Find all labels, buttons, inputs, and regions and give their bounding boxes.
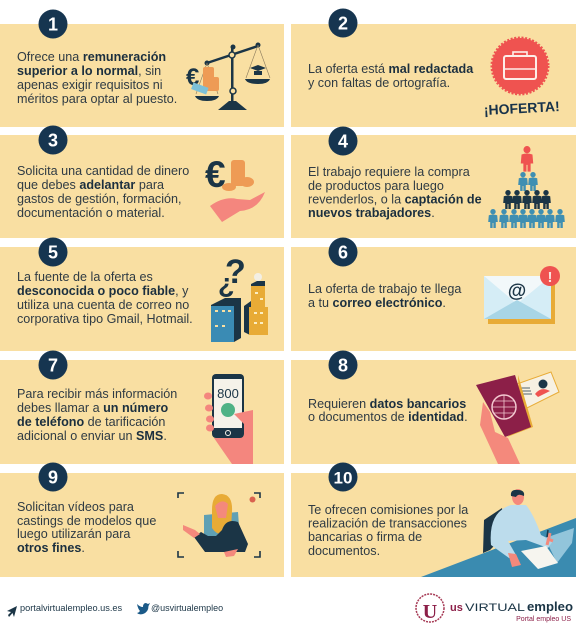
icon: question marks and buildings: ¿	[218, 268, 234, 298]
text 7: debes llamar a	[17, 401, 103, 415]
text 10: Te ofrecen comisiones por la	[308, 503, 468, 517]
icon: scale: €	[186, 64, 199, 91]
illustration: man signing documents	[421, 489, 576, 577]
text 4: revenderlos, o la	[308, 192, 405, 206]
text 4: .	[431, 206, 435, 220]
number 1	[38, 10, 68, 38]
footer: twitter handle: @usvirtualempleo	[151, 603, 223, 613]
text 1: apenas exigir requisitos ni	[17, 78, 163, 92]
text 6: correo electrónico.	[333, 296, 446, 310]
text 3: documentación o material.	[17, 206, 165, 220]
icon: badge with briefcase	[483, 38, 560, 118]
text 9: otros fines	[17, 541, 81, 555]
number 1: 1	[48, 14, 58, 34]
number 4: 4	[338, 132, 348, 152]
logo: usvirtual empleo	[450, 599, 573, 623]
logo: universidad de sevilla crest	[416, 594, 444, 623]
panel: 10	[291, 462, 576, 577]
logo: usvirtual empleo: us	[450, 602, 463, 614]
icon: passport and id card	[476, 372, 559, 464]
number 7: 7	[48, 356, 58, 376]
icon: video frame with woman	[178, 493, 260, 557]
icon: question marks and buildings	[211, 253, 268, 342]
number 8	[328, 350, 358, 380]
text 5: utiliza una cuenta de correo no	[17, 298, 189, 312]
text 7: Para recibir más información	[17, 387, 177, 401]
panel: 1	[0, 10, 284, 127]
text 3: gastos de gestión, formación,	[17, 192, 182, 206]
text 4: de productos para luego	[308, 179, 444, 193]
number 10	[328, 462, 358, 492]
text 4: nuevos trabajadores	[308, 206, 431, 220]
text 7: de teléfono	[17, 415, 84, 429]
number 2	[328, 8, 358, 38]
text 7: SMS.	[136, 429, 167, 443]
text 5: desconocida o poco fiable	[17, 284, 175, 298]
text 8: identidad.	[408, 410, 468, 424]
text 6: a tu	[308, 296, 333, 310]
text 9: castings de modelos que	[17, 514, 156, 528]
number 9	[38, 462, 68, 492]
number 5	[38, 238, 68, 266]
text 1: superior a lo normal	[17, 64, 138, 78]
text 2: mal redactada	[389, 62, 474, 76]
icon: coins over hand: €	[205, 154, 226, 195]
text 5: La fuente de la oferta es	[17, 270, 153, 284]
icon: envelope with alert: !	[548, 269, 552, 286]
text 7: de tarificación	[84, 415, 165, 429]
text 2: y con faltas de ortografía.	[308, 76, 450, 90]
logo: usvirtual empleo: VIRTUAL	[465, 602, 525, 614]
icon: envelope with alert	[484, 266, 560, 324]
text 9: luego utilizarán para	[17, 527, 130, 541]
text 8: datos bancarios	[370, 397, 466, 411]
number 3: 3	[48, 130, 58, 150]
text 7: adicional o enviar un	[17, 429, 136, 443]
text 1: méritos para optar al puesto.	[17, 92, 177, 106]
text 3: que debes	[17, 178, 79, 192]
icon: phone in hand	[204, 374, 253, 464]
text 4: El trabajo requiere la compra	[308, 165, 470, 179]
icon: envelope with alert: @	[508, 281, 526, 302]
text 10: bancarias o firma de	[308, 530, 422, 544]
panel: 5	[0, 238, 284, 351]
number 2: 2	[338, 14, 348, 34]
text 10: documentos.	[308, 544, 380, 558]
text 1: remuneración	[83, 50, 166, 64]
text 6: La oferta de trabajo te llega	[308, 282, 461, 296]
number 6	[328, 238, 358, 266]
logo: usvirtual empleo: empleo	[527, 599, 573, 614]
text 4: captación de	[405, 192, 482, 206]
panel: 3	[0, 126, 284, 238]
number 3	[38, 126, 68, 154]
logo: universidad de sevilla crest: U	[423, 601, 437, 623]
label: hoferta: ¡HOFERTA!	[483, 98, 560, 118]
text 1: Ofrece una	[17, 50, 83, 64]
number 8: 8	[338, 356, 348, 376]
text 5: , y	[175, 284, 189, 298]
text 8: Requieren	[308, 397, 370, 411]
number 7	[38, 350, 68, 380]
logo: usvirtual empleo: Portal empleo US	[516, 616, 571, 623]
number 6: 6	[338, 242, 348, 262]
icon: scale	[186, 42, 270, 110]
icon: question marks and buildings: ?	[225, 253, 246, 291]
text 9: Solicitan vídeos para	[17, 500, 134, 514]
icon: pyramid of people	[488, 146, 565, 228]
panel: 9	[0, 462, 284, 577]
panel: 7	[0, 350, 284, 464]
panel: 4	[291, 126, 576, 238]
number 4	[328, 126, 358, 156]
panel: 8	[291, 350, 576, 464]
panel: 2	[291, 8, 576, 127]
footer: website link	[7, 603, 123, 617]
number 5: 5	[48, 242, 58, 262]
text 8: o documentos de	[308, 410, 408, 424]
panel: 6	[291, 238, 576, 351]
text 2: La oferta está	[308, 62, 389, 76]
number 10: 10	[334, 468, 352, 488]
text 7: un número	[103, 401, 168, 415]
text 1: , sin	[138, 64, 161, 78]
number 9: 9	[48, 468, 58, 488]
text 3: adelantar para	[79, 178, 164, 192]
text 9: .	[81, 541, 85, 555]
text 10: realización de transacciones	[308, 516, 467, 530]
text 5: corporativa tipo Gmail, Hotmail.	[17, 312, 193, 326]
text 3: Solicita una cantidad de dinero	[17, 164, 189, 178]
icon: coins over hand	[205, 154, 265, 222]
icon: phone in hand: 800	[217, 386, 239, 401]
footer: website link: portalvirtualempleo.us.es	[20, 603, 123, 613]
